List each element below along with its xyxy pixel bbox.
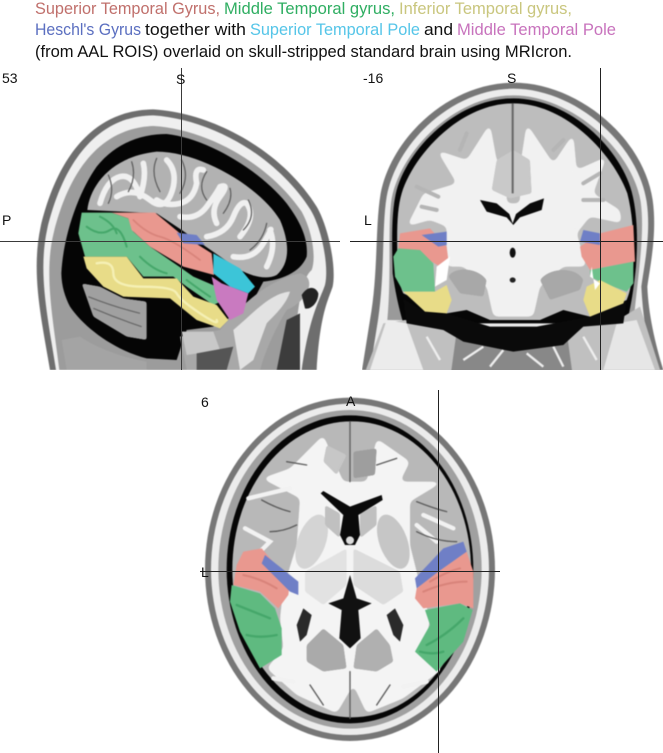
sagittal labels (2, 70, 185, 228)
axial crosshair (200, 390, 500, 753)
coronal crosshair (350, 68, 663, 370)
coronal left green region (393, 248, 435, 292)
sagittal labels: S (176, 71, 185, 87)
coronal brain (397, 103, 634, 320)
title text block (35, 0, 616, 61)
axial right red region (415, 552, 473, 608)
coronal left blue region (422, 232, 447, 247)
panel: axial brain slice (200, 390, 500, 753)
title text block: Inferior Temporal gyrus, (399, 0, 572, 18)
axial basal ganglia (289, 510, 335, 573)
axial labels: A (346, 393, 356, 409)
panel: sagittal brain slice (0, 68, 340, 370)
sagittal magenta region (212, 277, 248, 320)
sagittal crosshair (0, 68, 340, 370)
axial ventricles (321, 491, 383, 545)
axial right green region (415, 603, 473, 672)
axial labels: L (201, 564, 209, 580)
title text block: Heschl's Gyrus (35, 21, 141, 39)
coronal right green region (590, 262, 633, 292)
coronal labels: -16 (363, 70, 383, 86)
axial head outline (205, 398, 495, 741)
axial left red region (233, 548, 290, 608)
sagittal cortex (87, 152, 287, 277)
axial midbrain and occipital horns (328, 575, 372, 648)
coronal head outline (362, 83, 663, 370)
coronal labels (363, 70, 516, 228)
coronal left red region (398, 228, 448, 267)
title text block: Superior Temporal Pole (250, 21, 420, 39)
coronal right blue region (580, 230, 600, 245)
title text block: Middle Temporal Pole (457, 21, 616, 39)
sagittal cyan region (213, 253, 255, 293)
axial labels: 6 (201, 394, 209, 410)
sagittal labels: 53 (2, 70, 18, 86)
coronal left yellow region (403, 285, 452, 313)
coronal right yellow region (583, 280, 627, 317)
title text block: and (424, 21, 453, 39)
axial brain (232, 421, 471, 717)
coronal labels: S (507, 70, 516, 86)
coronal lower head (366, 306, 660, 370)
sagittal cerebellum (82, 283, 147, 340)
sagittal face and neck tissue (180, 273, 309, 370)
title text block: together with (145, 21, 246, 39)
sagittal blue region (177, 233, 205, 245)
sagittal labels: P (2, 212, 11, 228)
sagittal green region (78, 213, 221, 305)
sagittal head outline (37, 109, 334, 370)
coronal labels: L (364, 212, 372, 228)
axial left green region (230, 585, 282, 668)
panel: coronal brain slice (350, 68, 663, 380)
sagittal yellow region (83, 257, 228, 328)
title text block: (from AAL ROIS) overlaid on skull-stripped standard brain using MRIcron. (35, 43, 572, 61)
axial right blue region (415, 542, 467, 588)
coronal right red region (580, 225, 635, 270)
axial labels (201, 393, 356, 580)
title text block: Middle Temporal gyrus, (224, 0, 395, 18)
axial left blue region (262, 555, 298, 595)
title text block: Superior Temporal Gyrus, (35, 0, 220, 18)
sagittal red region (112, 213, 214, 275)
coronal deep structures (448, 270, 487, 297)
